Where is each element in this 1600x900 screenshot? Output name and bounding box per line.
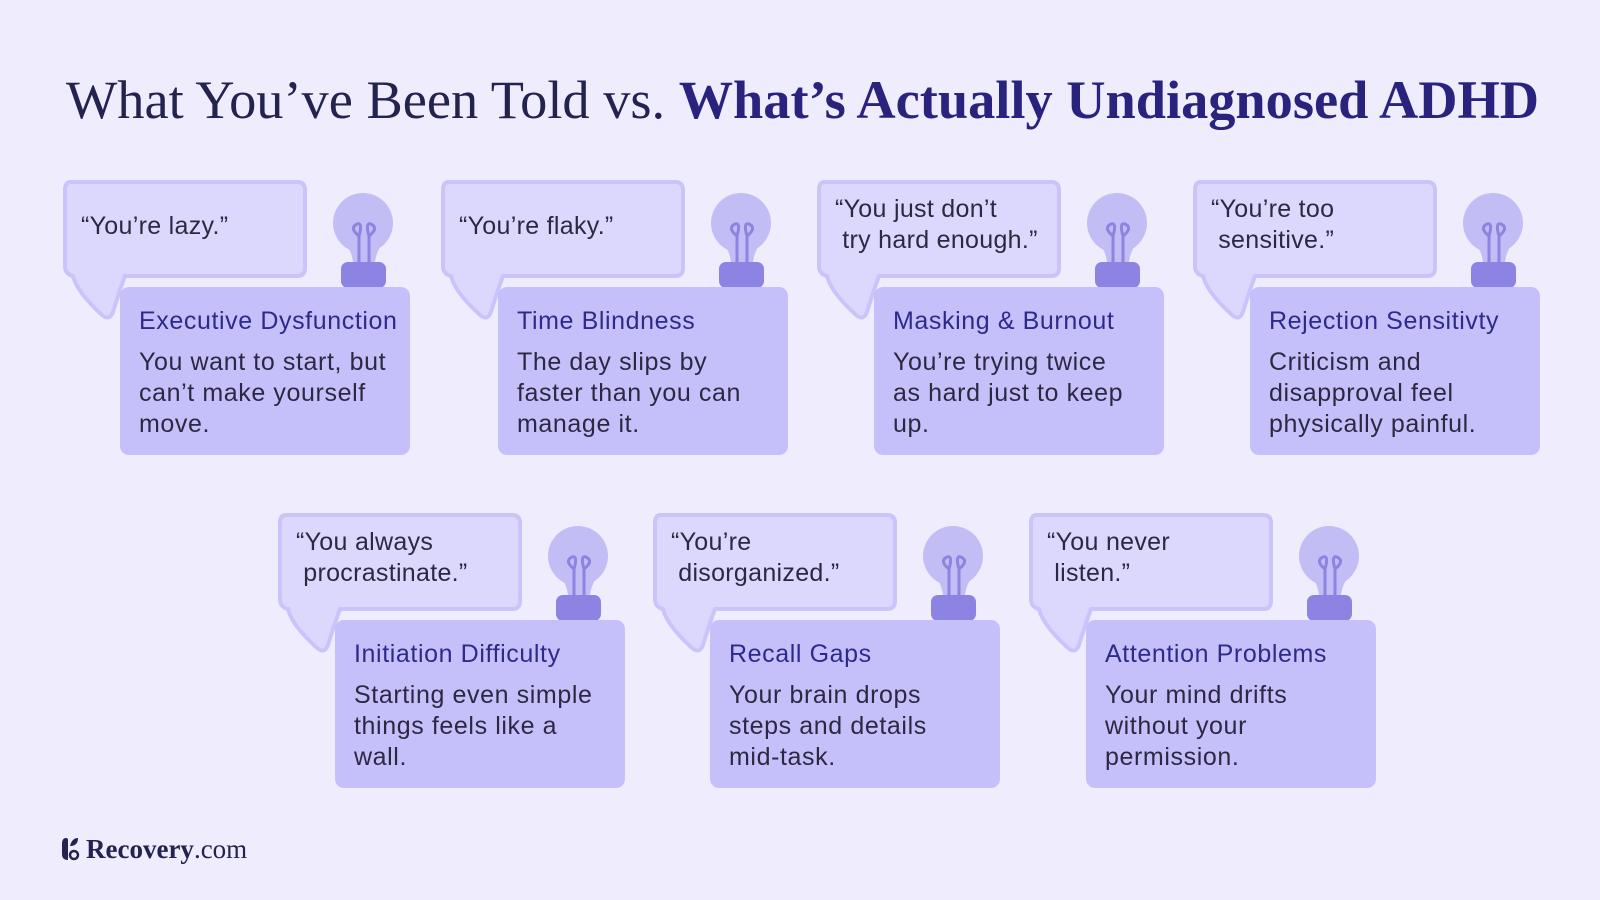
info box: manage it. bbox=[517, 410, 640, 438]
logo: Recovery.com bbox=[86, 834, 247, 864]
info box: permission. bbox=[1105, 743, 1239, 771]
info box bbox=[335, 620, 625, 788]
info box: Starting even simple bbox=[354, 681, 593, 709]
info box: Masking & Burnout bbox=[893, 307, 1114, 335]
card: Time Blindness: “You’re flaky.” bbox=[459, 212, 614, 240]
info box: mid-task. bbox=[729, 743, 836, 771]
card: Initiation Difficulty: procrastinate.” bbox=[303, 559, 468, 587]
card: Rejection Sensitivity: sensitive.” bbox=[1218, 226, 1334, 254]
info box: physically painful. bbox=[1269, 410, 1476, 438]
info box bbox=[1250, 287, 1540, 455]
card: Recall Gaps: disorganized.” bbox=[678, 559, 839, 587]
info box bbox=[1086, 620, 1376, 788]
info box bbox=[498, 287, 788, 455]
card: Masking & Burnout: try hard enough.” bbox=[842, 226, 1038, 254]
info box: Recall Gaps bbox=[729, 640, 872, 668]
info box: Initiation Difficulty bbox=[354, 640, 561, 668]
card: Recall Gaps bbox=[653, 513, 1000, 788]
info box: steps and details bbox=[729, 712, 927, 740]
info box: Your mind drifts bbox=[1105, 681, 1287, 709]
card: Recall Gaps: “You’re bbox=[671, 528, 751, 556]
card: Initiation Difficulty: “You always bbox=[296, 528, 433, 556]
card: Attention Problems: listen.” bbox=[1054, 559, 1130, 587]
info box: Executive Dysfunction bbox=[139, 307, 398, 335]
info box: things feels like a bbox=[354, 712, 557, 740]
info box: Criticism and bbox=[1269, 348, 1421, 376]
card: Executive Dysfunction bbox=[63, 180, 410, 455]
info box: You want to start, but bbox=[139, 348, 386, 376]
title: What You’ve Been Told vs. What’s Actually Undiagnosed ADHD bbox=[66, 70, 1539, 130]
card: Rejection Sensitivity: “You’re too bbox=[1211, 195, 1334, 223]
info box: without your bbox=[1105, 712, 1247, 740]
info box bbox=[874, 287, 1164, 455]
info box bbox=[120, 287, 410, 455]
card: Rejection Sensitivity bbox=[1193, 180, 1540, 455]
info box: Your brain drops bbox=[729, 681, 921, 709]
info box: Time Blindness bbox=[517, 307, 695, 335]
info box bbox=[710, 620, 1000, 788]
card: Attention Problems bbox=[1029, 513, 1376, 788]
info box: Attention Problems bbox=[1105, 640, 1327, 668]
info box: wall. bbox=[354, 743, 407, 771]
info box: can’t make yourself bbox=[139, 379, 366, 407]
card: Attention Problems: “You never bbox=[1047, 528, 1170, 556]
card: Masking & Burnout: “You just don’t bbox=[835, 195, 997, 223]
card: Initiation Difficulty bbox=[278, 513, 625, 788]
info box: up. bbox=[893, 410, 930, 438]
info box: Rejection Sensitivty bbox=[1269, 307, 1499, 335]
info box: as hard just to keep bbox=[893, 379, 1123, 407]
info box: disapproval feel bbox=[1269, 379, 1454, 407]
card: Executive Dysfunction: “You’re lazy.” bbox=[81, 212, 228, 240]
info box: You’re trying twice bbox=[893, 348, 1106, 376]
card: Masking & Burnout bbox=[817, 180, 1164, 455]
info box: The day slips by bbox=[517, 348, 707, 376]
info box: move. bbox=[139, 410, 210, 438]
card: Time Blindness bbox=[441, 180, 788, 455]
info box: faster than you can bbox=[517, 379, 741, 407]
